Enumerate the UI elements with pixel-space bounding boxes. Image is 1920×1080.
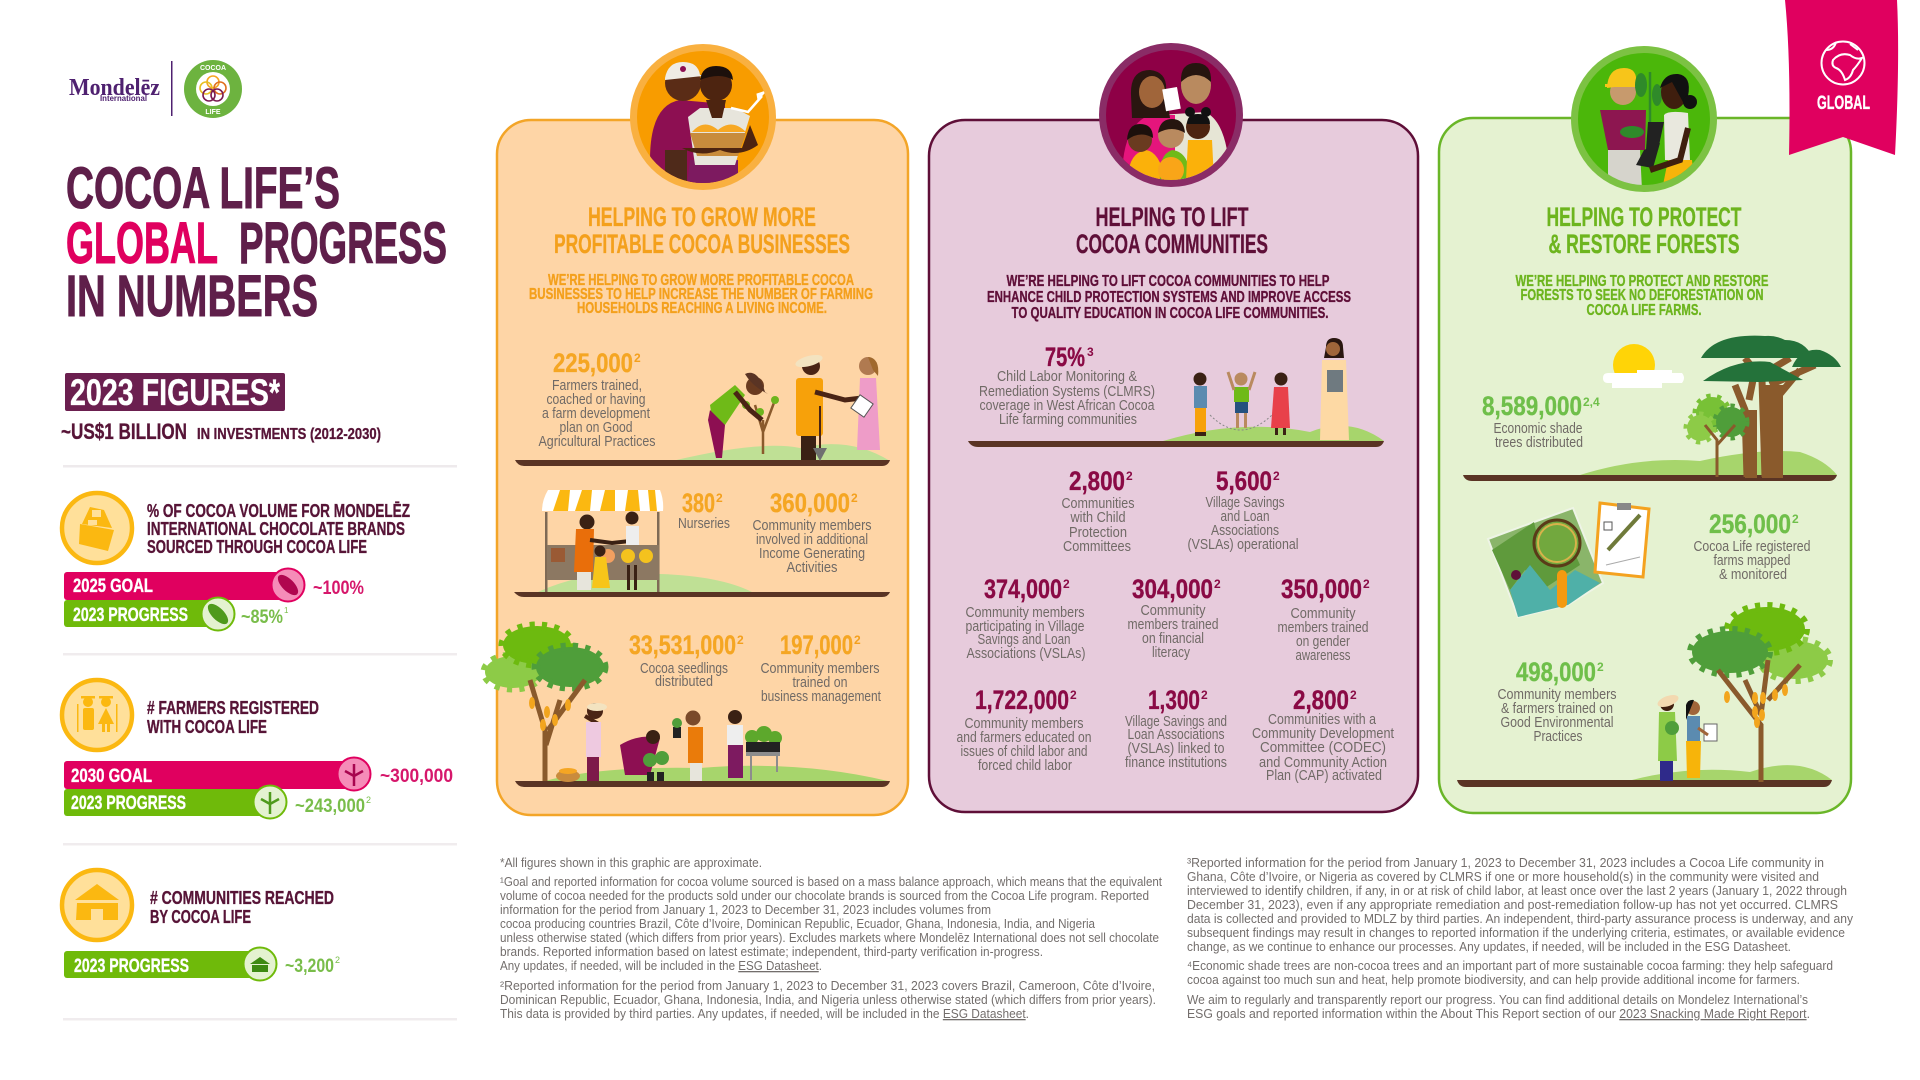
title: PROGRESS	[239, 211, 447, 276]
stat: VSLA participants: Associations (VSLAs)	[966, 646, 1086, 662]
stat: VSLAs linked to finance: finance institutions	[1125, 755, 1227, 771]
footnotes: left column: brands. Reported information based on latest estimate; independent, third-party verification in-progress.	[500, 944, 1043, 959]
stat: business management: 2	[854, 633, 861, 647]
stat: nurseries	[678, 488, 730, 532]
bar: 2023 progress: 2023 PROGRESS	[74, 956, 189, 977]
stat: CLMRS coverage	[979, 342, 1155, 428]
heading: BY COCOA LIFE	[150, 907, 251, 927]
heading	[147, 698, 319, 737]
logo: Cocoa Life badge	[184, 60, 242, 118]
subheading: WE’RE HELPING TO GROW MORE PROFITABLE COCOA	[548, 272, 854, 289]
heading: % OF COCOA VOLUME FOR MONDELĒZ	[147, 501, 410, 521]
footnotes: right column	[1187, 855, 1853, 1021]
stat: cocoa seedlings	[629, 630, 744, 690]
illustration: cocoa tree and farmers	[1457, 607, 1832, 787]
stat: VSLA participants: Community members	[966, 605, 1084, 621]
heading: # COMMUNITIES REACHED	[150, 888, 334, 908]
stat: VSLAs operational: 5,600	[1216, 466, 1272, 496]
heading: HELPING TO GROW MORE	[588, 202, 816, 232]
stat: gender awareness	[1278, 574, 1370, 664]
footnotes: left column: Any updates, if needed, will be included in the ESG Datasheet.	[500, 958, 822, 973]
bar: 2023 progress: ~85%	[241, 607, 283, 628]
stat: farmers trained: a farm development	[542, 406, 650, 422]
footnotes: left column: unless otherwise stated (which differs from prior years). Excludes markets where Mondelēz International does not sell chocolate	[500, 930, 1159, 945]
footnotes: right column: cocoa against too much sun and heat, help promote biodiversity, and can help provide additional income for farmers.	[1187, 972, 1800, 987]
stat: CODEC and CAP: Committee (CODEC)	[1260, 740, 1386, 756]
stat: child labor education	[956, 685, 1092, 774]
footnotes: right column: ⁴Economic shade trees are non-cocoa trees and an important part of more sustainable cocoa farming: they help safeguard	[1187, 958, 1833, 973]
stat: gender awareness: 2	[1363, 577, 1370, 591]
heading: INTERNATIONAL CHOCOLATE BRANDS	[147, 519, 405, 539]
title: COCOA LIFE’S	[66, 156, 340, 221]
subheading: WE’RE HELPING TO LIFT COCOA COMMUNITIES TO HELP	[1006, 273, 1330, 290]
stat: CODEC and CAP: Community Development	[1252, 726, 1394, 742]
stat: environmental practices: Good Environmental	[1500, 715, 1614, 731]
stat: farms mapped: 2	[1792, 512, 1799, 526]
stat: child labor education: Community members	[964, 716, 1084, 732]
stat: VSLAs operational: 2	[1273, 469, 1280, 483]
subheading	[987, 273, 1351, 322]
stat: income generating activities: Activities	[786, 560, 838, 576]
subheading: ENHANCE CHILD PROTECTION SYSTEMS AND IMPROVE ACCESS	[987, 289, 1351, 306]
stat: VSLAs linked to finance: 1,300	[1148, 685, 1200, 715]
stat: child labor education: issues of child labor and	[960, 744, 1088, 760]
stat: financial literacy: on financial	[1142, 631, 1204, 647]
metric: cocoa volume	[62, 493, 410, 630]
bar: 2023 progress: 2	[366, 795, 371, 805]
stat: farmers trained: plan on Good	[560, 420, 632, 436]
footnotes: right column: ESG goals and reported information within the About This Report section of our 2023 Snacking Made Right Report.	[1187, 1006, 1810, 1021]
heading: & RESTORE FORESTS	[1548, 229, 1740, 259]
stat: environmental practices: Practices	[1534, 729, 1582, 745]
stat: shade trees: 2,4	[1583, 395, 1600, 409]
stat: CLMRS coverage: 75%	[1045, 342, 1085, 372]
bar: 2023 progress: 1	[284, 606, 289, 615]
stat: VSLAs operational: and Loan	[1220, 509, 1270, 525]
investment line	[61, 419, 381, 444]
stat: gender awareness: awareness	[1296, 648, 1350, 664]
stat: CODEC and CAP	[1252, 685, 1394, 784]
stat: environmental practices: 2	[1597, 660, 1604, 674]
panel: cocoa communities	[500, 0, 1898, 1021]
heading	[554, 202, 850, 259]
stat: gender awareness: on gender	[1296, 634, 1350, 650]
icon: globe	[1822, 42, 1864, 84]
stat: child protection committees: 2,800	[1069, 466, 1125, 496]
stat: cocoa seedlings: distributed	[655, 674, 713, 690]
footnotes: left column: This data is provided by third parties. Any updates, if needed, will be included in the ESG Datasheet.	[500, 1006, 1029, 1021]
title: IN NUMBERS	[66, 264, 318, 329]
logo: Cocoa Life badge: COCOA	[200, 65, 226, 72]
illustration: sun and trees	[1463, 336, 1841, 481]
stat: farmers trained: Farmers trained,	[552, 378, 642, 394]
stat: business management: trained on	[792, 675, 848, 691]
footnotes: left column: Dominican Republic, Ecuador, Ghana, Indonesia, India, and Nigeria unless otherwise stated (which differs from prior years).	[500, 992, 1156, 1007]
bar: 2023 progress	[64, 786, 371, 818]
footnotes: right column: interviewed to identify children, if any, in or at risk of child labor, at least once over the last 2 years (January 1, 2022 through	[1187, 883, 1847, 898]
stat: environmental practices: 498,000	[1516, 657, 1596, 687]
title: GLOBAL	[66, 211, 218, 276]
stat: farms mapped: farms mapped	[1714, 553, 1790, 569]
stat: shade trees: 8,589,000	[1482, 391, 1582, 421]
footnotes: left column: ²Reported information for the period from January 1, 2023 to December 31, 2023 covers Brazil, Cameroon, Côte d’Ivoire,	[500, 978, 1155, 993]
logo: Mondelez International: International	[100, 94, 147, 103]
stat: environmental practices	[1498, 657, 1616, 745]
stat: CLMRS coverage: Life farming communities	[999, 412, 1137, 428]
stat: VSLAs operational: (VSLAs) operational	[1188, 537, 1298, 553]
stat: VSLA participants: 374,000	[984, 574, 1062, 604]
subheading: COCOA LIFE FARMS.	[1586, 302, 1702, 319]
illustration: map and clipboard	[1488, 503, 1649, 617]
footnotes: left column: volume of cocoa needed for the products sold under our chocolate brands is sourced from the Cocoa Life program. Reported	[500, 888, 1149, 903]
bar: 2025 goal: 2025 GOAL	[73, 576, 153, 597]
bar: 2023 progress: 2	[335, 955, 340, 965]
logo: Mondelez International: Mondelēz	[69, 75, 160, 101]
bar: 2023 progress: ~243,000	[295, 796, 365, 817]
bar: 2030 goal: ~300,000	[380, 766, 453, 787]
stat: income generating activities: 360,000	[770, 488, 850, 518]
stat: cocoa seedlings: Cocoa seedlings	[640, 661, 728, 677]
heading: HELPING TO LIFT	[1096, 202, 1249, 232]
subheading: WE’RE HELPING TO PROTECT AND RESTORE	[1516, 273, 1768, 290]
stat: gender awareness: Community	[1290, 606, 1356, 622]
stat: shade trees: trees distributed	[1495, 435, 1583, 451]
bar: 2025 goal: ~100%	[313, 578, 364, 599]
stat: farmers trained: coached or having	[546, 392, 646, 408]
stat: environmental practices: & farmers trained on	[1501, 701, 1613, 717]
stat: farms mapped	[1694, 509, 1810, 583]
stat: nurseries: 2	[716, 491, 723, 505]
stat: child labor education: 2	[1070, 688, 1077, 702]
stat: VSLA participants: Savings and Loan	[978, 632, 1070, 648]
metric: farmers registered	[62, 680, 453, 818]
subheading: BUSINESSES TO HELP INCREASE THE NUMBER OF FARMING	[529, 286, 873, 303]
stat: VSLA participants	[966, 574, 1086, 662]
investment line: ~US$1 BILLION	[61, 419, 187, 444]
bar: 2030 goal: 2030 GOAL	[71, 766, 152, 787]
stat: child labor education: 1,722,000	[975, 685, 1069, 715]
stat: income generating activities: involved in additional	[756, 532, 868, 548]
stat: CLMRS coverage: coverage in West African Cocoa	[980, 398, 1155, 414]
icon: farmers	[62, 680, 132, 750]
stat: shade trees	[1482, 391, 1600, 451]
icon: family	[1099, 43, 1243, 187]
stat: income generating activities: Income Generating	[759, 546, 865, 562]
figures banner: 2023 FIGURES*	[70, 372, 280, 413]
icon: chocolate bar	[62, 493, 132, 563]
stat: farmers trained	[538, 348, 656, 450]
illustration: cocoa tree and seedlings	[485, 626, 890, 787]
stat: VSLA participants: participating in Village	[966, 619, 1084, 635]
footnotes: left column: cocoa producing countries Brazil, Côte d’Ivoire, Dominican Republic, Ecuador, Ghana, Indonesia, India, and Nigeria	[500, 916, 1096, 931]
heading	[147, 501, 410, 557]
stat: VSLAs linked to finance	[1125, 685, 1227, 771]
subheading: TO QUALITY EDUCATION IN COCOA LIFE COMMUNITIES.	[1012, 305, 1328, 322]
footnotes: right column: change, as we continue to enhance our processes. Any updates, if needed, will be included in the ESG Datasheet.	[1187, 939, 1791, 954]
stat: CLMRS coverage: Remediation Systems (CLMRS)	[979, 384, 1155, 400]
stat: environmental practices: Community members	[1498, 687, 1616, 703]
stat: child protection committees: 2	[1126, 469, 1133, 483]
stat: VSLAs linked to finance: (VSLAs) linked to	[1128, 741, 1224, 757]
metric: communities reached	[62, 870, 340, 980]
footnotes: right column: data is collected and provided to MDLZ by third parties. An independent, third-party assurance process is underway, and any	[1187, 911, 1853, 926]
panel: profitable businesses	[497, 44, 908, 815]
stat: business management: Community members	[760, 661, 880, 677]
logo: Cocoa Life badge: LIFE	[205, 109, 221, 116]
footnotes: right column: subsequent findings may result in changes to reported information if the underlying criteria, estimates, or available evidence	[1187, 925, 1845, 940]
heading	[1546, 202, 1742, 259]
footnotes: left column	[500, 855, 1162, 1021]
stat: farms mapped: & monitored	[1719, 567, 1787, 583]
stall illustration	[514, 490, 890, 597]
stat: gender awareness: members trained	[1278, 620, 1368, 636]
stat: nurseries: Nurseries	[678, 516, 730, 532]
investment line: IN INVESTMENTS (2012-2030)	[197, 426, 381, 443]
stat: VSLAs linked to finance: Village Savings and	[1125, 714, 1227, 730]
footnotes: left column: *All figures shown in this graphic are approximate.	[500, 855, 762, 870]
subheading: FORESTS TO SEEK NO DEFORESTATION ON	[1520, 287, 1764, 304]
panel: forests	[1439, 46, 1851, 813]
stat: CODEC and CAP: Communities with a	[1268, 712, 1377, 728]
heading	[150, 888, 334, 927]
stat: VSLAs operational: Village Savings	[1206, 495, 1284, 511]
stat: farms mapped: 256,000	[1709, 509, 1791, 539]
footnotes: right column: We aim to regularly and transparently report our progress. You can find additional details on Mondelez International’s	[1187, 992, 1808, 1007]
ribbon: global	[1785, 0, 1898, 155]
stat: farmers trained: 225,000	[553, 348, 633, 378]
stat: child protection committees: Communities	[1062, 496, 1134, 512]
stat: VSLAs operational	[1188, 466, 1298, 553]
stat: business management	[760, 630, 881, 705]
footnotes: right column: Ghana, Côte d’Ivoire, or Nigeria as covered by CLMRS if one or more household(s) in the community were visited and	[1187, 869, 1819, 884]
ribbon: global: GLOBAL	[1817, 93, 1870, 114]
heading: PROFITABLE COCOA BUSINESSES	[554, 229, 850, 259]
stat: business management: 197,000	[780, 630, 853, 660]
stat: financial literacy: Community	[1140, 603, 1206, 619]
stat: child protection committees: Protection	[1069, 525, 1127, 541]
stat: financial literacy: members trained	[1128, 617, 1218, 633]
footnotes: left column: information for the period from January 1, 2023 to December 31, 2023 includes volumes from	[500, 902, 991, 917]
heading: COCOA COMMUNITIES	[1076, 229, 1268, 259]
subheading: HOUSEHOLDS REACHING A LIVING INCOME.	[577, 300, 827, 317]
footnotes: right column: December 31, 2023), even if any appropriate remediation and post-remediation follow-up has not yet occurred. CLMRS	[1187, 897, 1838, 912]
stat: VSLAs linked to finance: Loan Associations	[1128, 727, 1224, 743]
stat: VSLAs operational: Associations	[1211, 523, 1279, 539]
heading	[1076, 202, 1268, 259]
stat: CLMRS coverage: Child Labor Monitoring &	[997, 369, 1137, 385]
heading: WITH COCOA LIFE	[147, 717, 267, 737]
logos	[69, 60, 242, 118]
stat: CODEC and CAP: Plan (CAP) activated	[1266, 768, 1382, 784]
stat: business management: business management	[761, 689, 881, 705]
icon: farmers with basket	[630, 44, 776, 190]
stat: financial literacy: 304,000	[1132, 574, 1213, 604]
stat: nurseries: 380	[682, 488, 715, 518]
stat: income generating activities	[752, 488, 872, 576]
heading: SOURCED THROUGH COCOA LIFE	[147, 537, 367, 557]
stat: CLMRS coverage: 3	[1087, 345, 1094, 359]
heading: HELPING TO PROTECT	[1546, 202, 1742, 232]
stat: VSLA participants: 2	[1063, 577, 1070, 591]
icon: hut	[62, 870, 132, 940]
stat: child protection committees: with Child	[1070, 510, 1126, 526]
bar: 2025 goal	[64, 568, 364, 602]
stat: cocoa seedlings: 2	[737, 633, 744, 647]
stat: CODEC and CAP: and Community Action	[1259, 755, 1387, 771]
stat: child labor education: forced child labor	[978, 758, 1072, 774]
stat: shade trees: Economic shade	[1494, 421, 1582, 437]
stat: income generating activities: 2	[851, 491, 858, 505]
stat: income generating activities: Community members	[752, 518, 872, 534]
stat: CODEC and CAP: 2,800	[1293, 685, 1349, 715]
stat: CODEC and CAP: 2	[1350, 688, 1357, 702]
illustration: children and teacher	[968, 338, 1384, 447]
stat: financial literacy	[1128, 574, 1221, 661]
icon: planting partners	[1571, 46, 1717, 192]
footnotes: right column: ³Reported information for the period from January 1, 2023 to December 31, 2023 includes a Cocoa Life community in	[1187, 855, 1824, 870]
bar: 2023 progress: ~3,200	[285, 956, 334, 977]
stat: cocoa seedlings: 33,531,000	[629, 630, 736, 660]
stat: child protection committees	[1062, 466, 1134, 555]
stat: financial literacy: literacy	[1152, 645, 1191, 661]
title	[66, 156, 447, 329]
stat: farmers trained: Agricultural Practices	[538, 434, 656, 450]
bar: 2023 progress: 2023 PROGRESS	[71, 793, 186, 814]
bar: 2023 progress	[64, 948, 340, 980]
stat: farms mapped: Cocoa Life registered	[1694, 539, 1810, 555]
bar: 2023 progress: 2023 PROGRESS	[73, 605, 188, 626]
footnotes: left column: ¹Goal and reported information for cocoa volume sourced is based on a mass balance approach, which means that the equivalent	[500, 874, 1162, 889]
stat: farmers trained: 2	[634, 351, 641, 365]
heading: # FARMERS REGISTERED	[147, 698, 319, 718]
subheading	[529, 272, 873, 317]
stat: financial literacy: 2	[1214, 577, 1221, 591]
illustration: farmers and sapling	[515, 353, 890, 466]
subheading	[1516, 273, 1768, 319]
stat: child labor education: and farmers educated on	[956, 730, 1092, 746]
bar: 2023 progress	[64, 598, 289, 630]
stat: child protection committees: Committees	[1063, 539, 1131, 555]
stat: VSLAs linked to finance: 2	[1201, 688, 1208, 702]
bar: 2030 goal	[64, 758, 453, 790]
stat: gender awareness: 350,000	[1281, 574, 1362, 604]
